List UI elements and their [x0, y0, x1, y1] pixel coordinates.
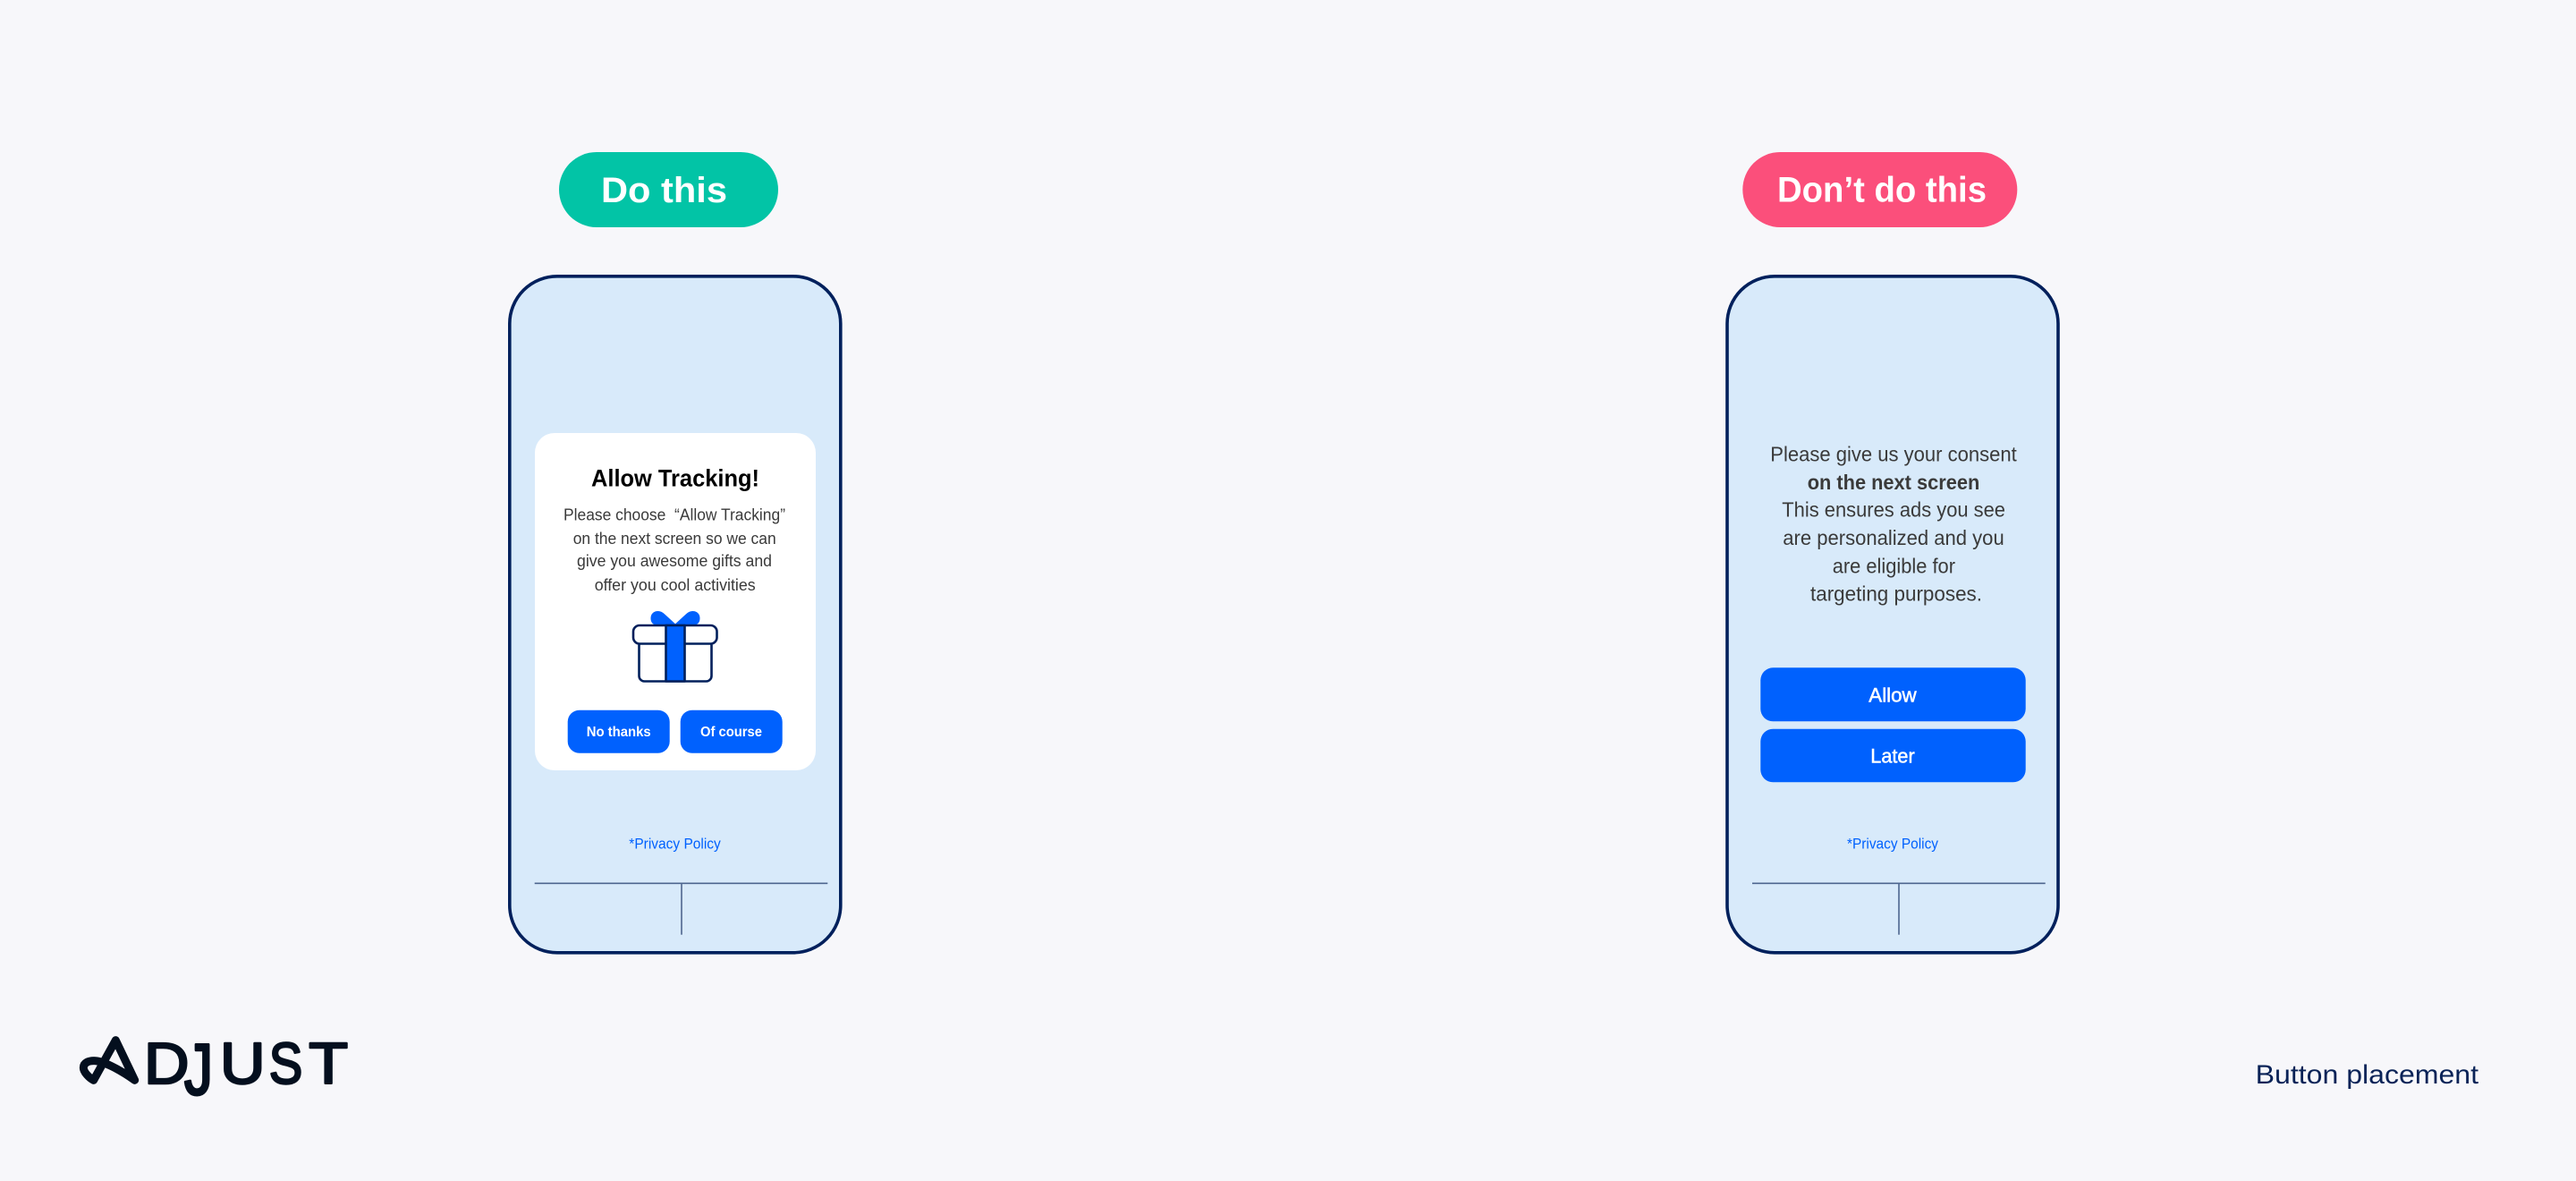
phone: don't do this — [1727, 276, 2058, 953]
home bar lines — [1752, 883, 2046, 935]
card body text — [564, 505, 785, 594]
button: later: Later — [1870, 744, 1915, 767]
logo wordmark: T — [309, 1031, 348, 1096]
consent copy: are personalized and you — [1783, 526, 2004, 549]
privacy link: *Privacy Policy — [629, 836, 721, 852]
logo wordmark: J — [184, 1029, 213, 1110]
button: no thanks — [568, 710, 670, 753]
consent copy: Please give us your consent — [1770, 443, 2017, 466]
card title: Allow Tracking! — [591, 465, 759, 492]
badge: do this — [559, 152, 778, 227]
phone: do this — [510, 276, 841, 953]
button: of course — [681, 710, 783, 753]
caption: button placement: Button placement — [2256, 1060, 2479, 1090]
icon: logo A mark — [83, 1041, 135, 1080]
consent copy: This ensures ads you see — [1782, 497, 2005, 521]
badge: don't do this: Don’t do this — [1777, 170, 1987, 209]
logo wordmark — [144, 1029, 348, 1110]
consent copy — [1770, 443, 2017, 605]
card body text: on the next screen so we can — [573, 529, 776, 548]
card body text: offer you cool activities — [595, 575, 756, 594]
home bar lines — [535, 883, 827, 935]
consent copy: are eligible for — [1833, 555, 1955, 578]
button: allow: Allow — [1868, 684, 1917, 706]
button: no thanks: No thanks — [587, 725, 651, 740]
consent card — [535, 433, 816, 770]
button: allow — [1760, 667, 2026, 721]
button: of course: Of course — [700, 725, 762, 740]
consent copy: on the next screen — [1808, 471, 1979, 494]
badge: don't do this — [1742, 152, 2017, 227]
logo wordmark: D — [144, 1031, 190, 1096]
icon: gift — [633, 612, 717, 682]
card body text: give you awesome gifts and — [577, 551, 772, 570]
button: later — [1760, 729, 2026, 782]
privacy link: *Privacy Policy — [1847, 836, 1939, 852]
panel: don't do this — [1727, 152, 2058, 953]
panel: do this — [510, 152, 841, 953]
card body text: Please choose “Allow Tracking” — [564, 505, 785, 524]
logo wordmark: U — [220, 1031, 265, 1096]
consent copy: targeting purposes. — [1810, 582, 1982, 605]
logo: Adjust — [83, 1029, 348, 1110]
badge: do this: Do this — [601, 171, 727, 210]
logo wordmark: S — [269, 1031, 302, 1096]
